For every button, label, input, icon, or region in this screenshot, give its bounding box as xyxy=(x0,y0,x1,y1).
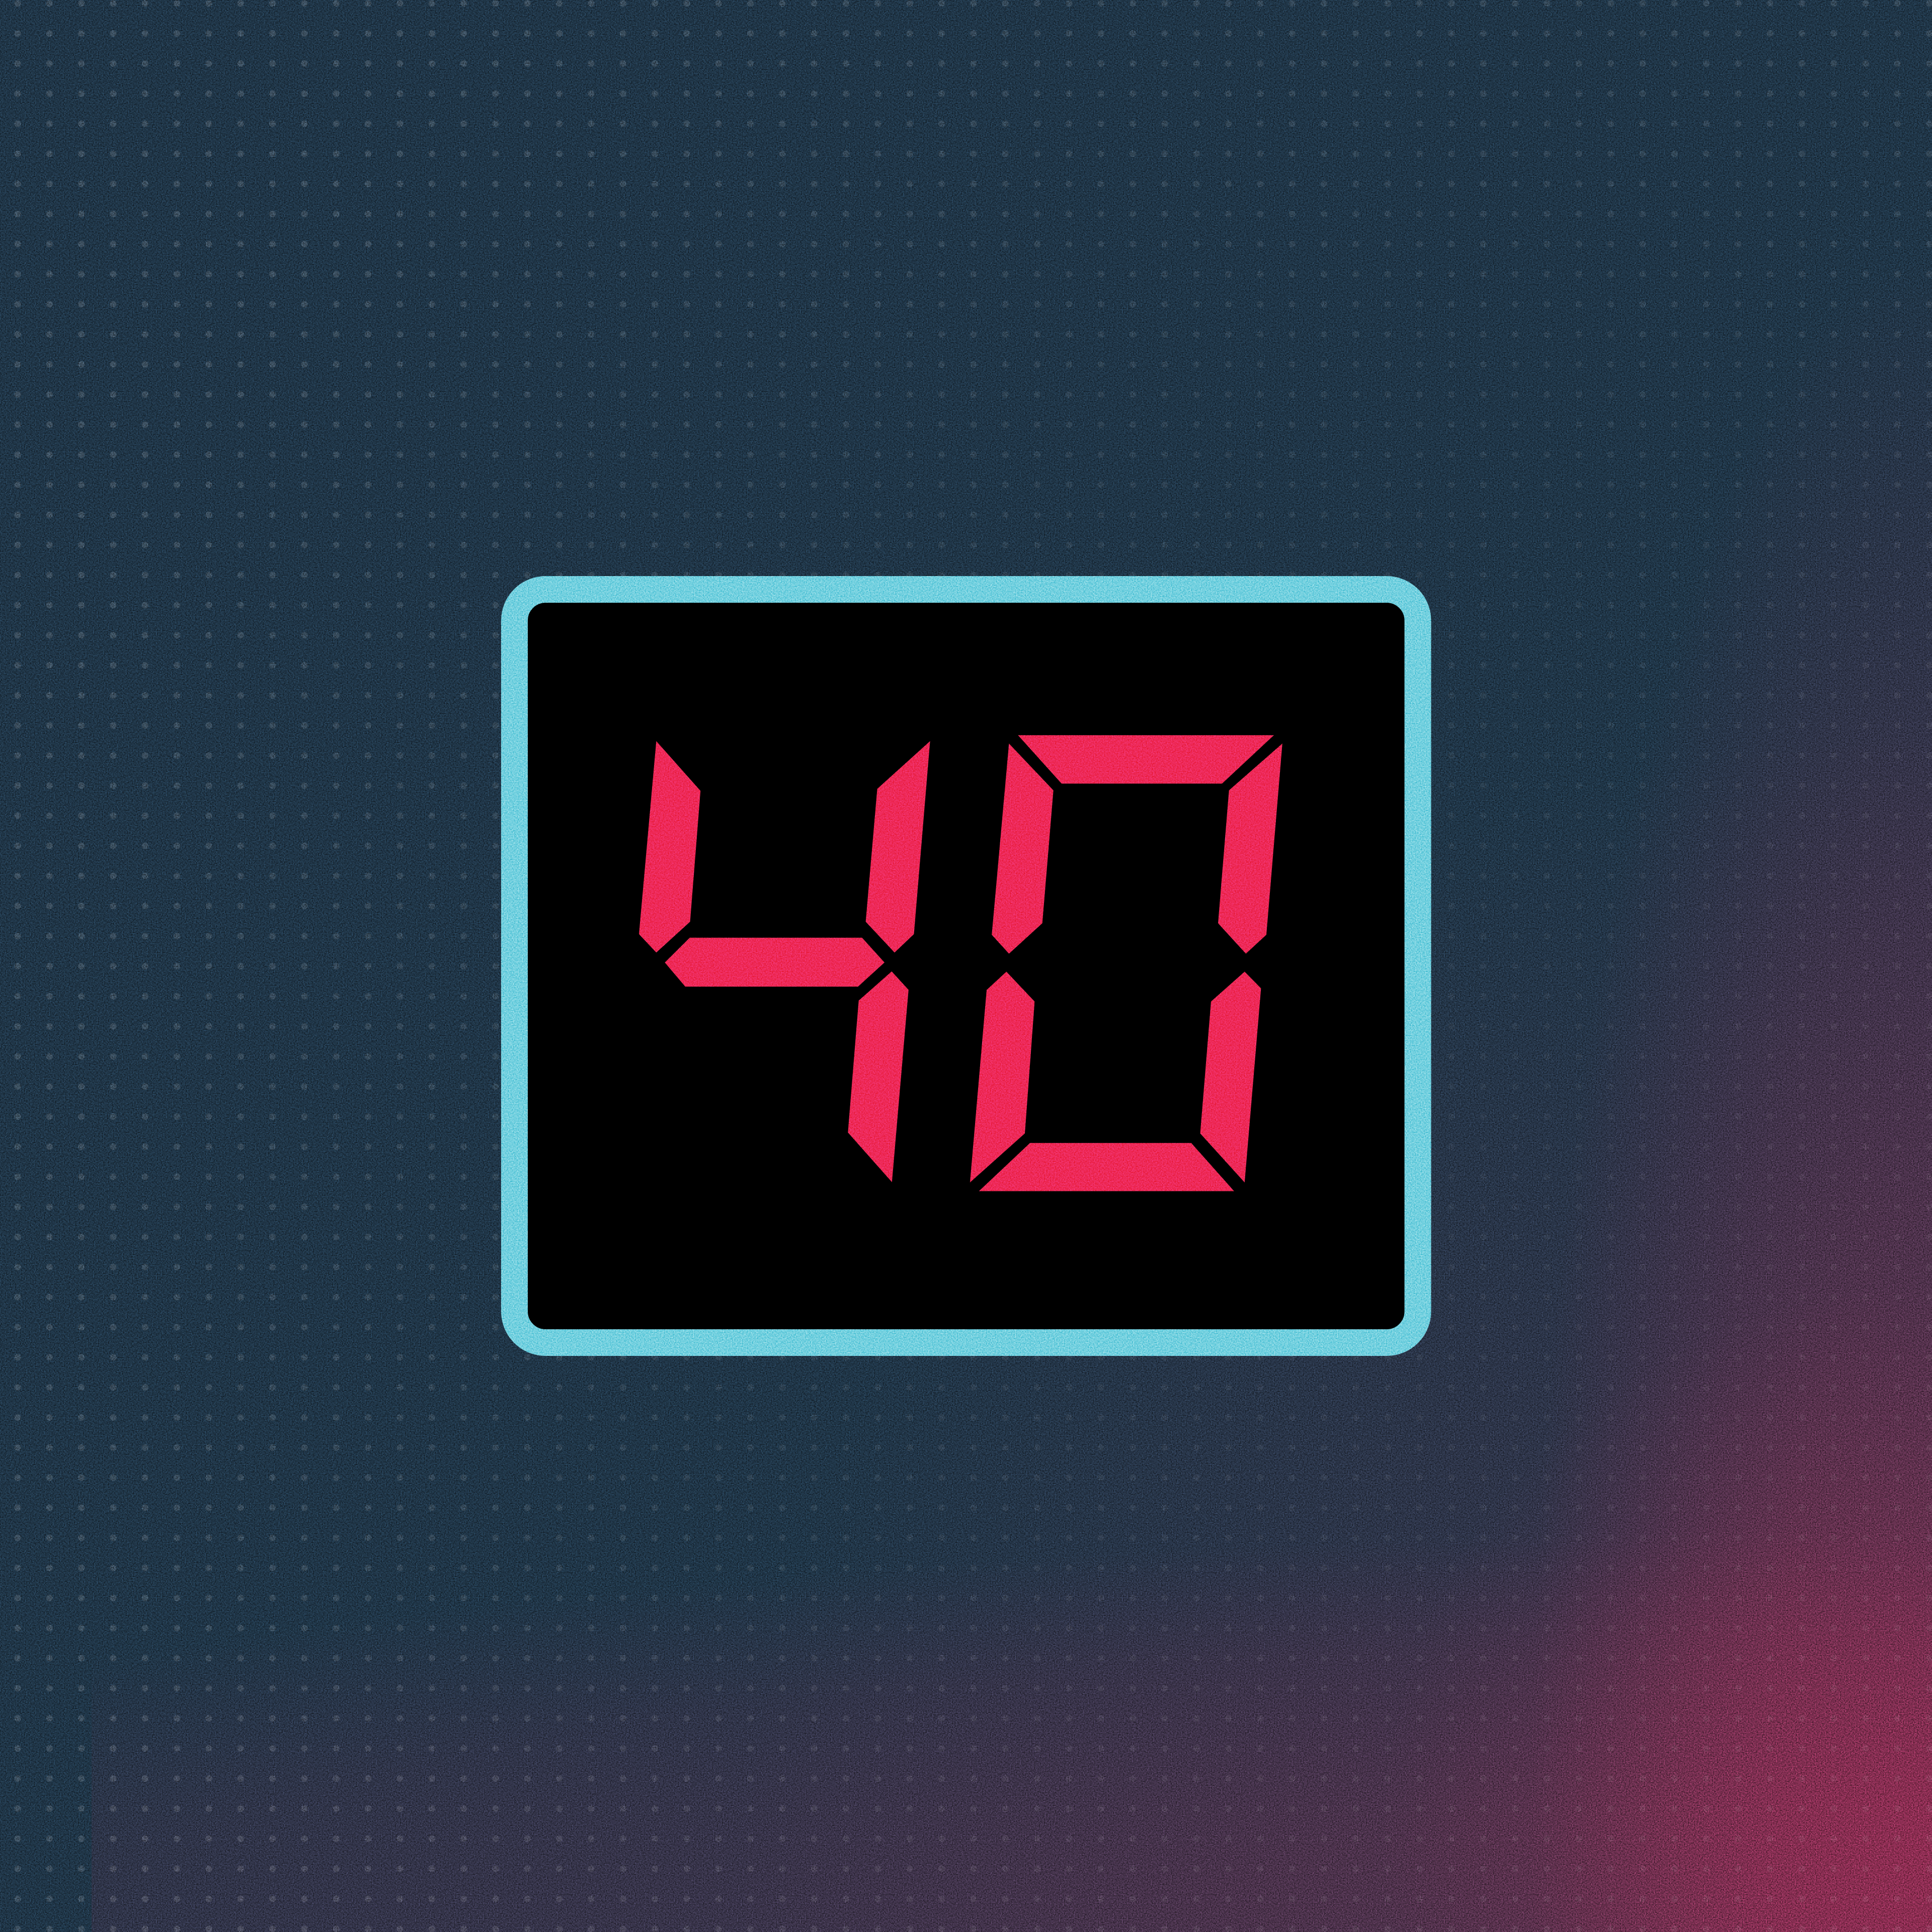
number: 40 in seven-segment digits xyxy=(639,735,1282,1191)
display frame xyxy=(514,590,1418,1342)
digit 4 xyxy=(639,741,930,1182)
panel: seven-segment display xyxy=(514,590,1418,1342)
digit 0 xyxy=(970,735,1282,1191)
